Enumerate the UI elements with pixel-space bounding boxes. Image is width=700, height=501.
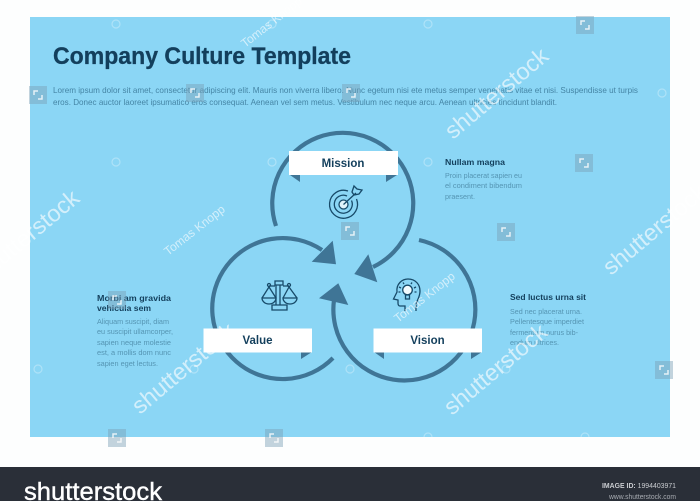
arrowhead: vision bbox=[319, 283, 348, 305]
text block: Morbi am gravida: est, a mollis dom nunc bbox=[97, 348, 171, 357]
text block: Sed luctus urna sit bbox=[510, 292, 586, 347]
watermark text: shutterstock bbox=[440, 42, 553, 144]
text block: Sed luctus urna sit: endum ultrices. bbox=[510, 338, 559, 347]
arrowhead: value bbox=[312, 241, 336, 264]
text block: Morbi am gravida: Morbi am gravida bbox=[97, 293, 171, 303]
text block: Sed luctus urna sit: Sed nec placerat urna. bbox=[510, 307, 582, 316]
text block: Nullam magna: praesent. bbox=[445, 192, 475, 201]
arc: value bbox=[212, 238, 333, 379]
arc: vision bbox=[333, 240, 475, 380]
text block: Morbi am gravida: Aliquam suscipit, diam bbox=[97, 317, 169, 326]
panel: blue background bbox=[30, 17, 670, 437]
text block: Morbi am gravida bbox=[97, 293, 173, 368]
text block: Nullam magna: Nullam magna bbox=[445, 157, 505, 167]
watermark badges bbox=[29, 16, 673, 447]
text block: Morbi am gravida: vehicula sem bbox=[97, 303, 151, 313]
banner: mission: Mission bbox=[322, 158, 364, 170]
text block: Morbi am gravida: sapien eget lectus. bbox=[97, 359, 158, 368]
banner: vision: Vision bbox=[410, 335, 445, 347]
text block: Morbi am gravida: eu suscipit ullamcorper, bbox=[97, 327, 173, 336]
text block: Nullam magna bbox=[445, 157, 522, 201]
title: Company Culture Template bbox=[53, 43, 351, 70]
arc: mission bbox=[272, 133, 413, 267]
text block: Nullam magna: el condiment bibendum bbox=[445, 181, 522, 190]
diagram: three cycle arcs bbox=[212, 133, 475, 380]
banner: value: Value bbox=[242, 335, 273, 347]
arrowhead: mission bbox=[354, 254, 377, 282]
text block: Sed luctus urna sit: fermentum purus bib- bbox=[510, 328, 579, 337]
watermark text: Tomas Knopp bbox=[391, 269, 458, 325]
watermark text: shutterstock bbox=[127, 317, 240, 419]
banner: vision bbox=[374, 328, 482, 359]
watermark text: Tomas Knopp bbox=[161, 202, 228, 258]
text block: Sed luctus urna sit: Pellentesque imperdiet bbox=[510, 317, 584, 326]
footer bar bbox=[0, 467, 700, 501]
footer url: www.shutterstock.com bbox=[608, 494, 676, 501]
text block: Morbi am gravida: sapien neque molestie bbox=[97, 338, 171, 347]
watermark small marks bbox=[34, 20, 666, 441]
banner: mission bbox=[289, 151, 398, 182]
text block: Sed luctus urna sit: Sed luctus urna sit bbox=[510, 292, 586, 302]
icon: target with dart bbox=[330, 186, 362, 218]
intro text: eros. Donec auctor laoreet ipsumatico eros consequat. Aenean vel sem metus. Vestibulum nec neque arcu. Aenean ultricies tincidunt blandit. bbox=[53, 97, 557, 107]
icon: scales bbox=[262, 281, 297, 310]
intro text: Lorem ipsum dolor sit amet, consectetur adipiscing elit. Mauris non viverra libero. Nunc egetum nisi ete metus semper venenatis vitae et nisi. Suspendisse ut turpis bbox=[53, 85, 638, 95]
watermark text: shutterstock bbox=[439, 318, 552, 420]
footer image id: IMAGE ID: 1994403971 bbox=[602, 481, 676, 490]
icon: head with light bulb bbox=[394, 279, 420, 311]
intro text bbox=[53, 85, 638, 107]
text block: Nullam magna: Proin placerat sapien eu bbox=[445, 171, 522, 180]
banner: value bbox=[204, 328, 312, 359]
